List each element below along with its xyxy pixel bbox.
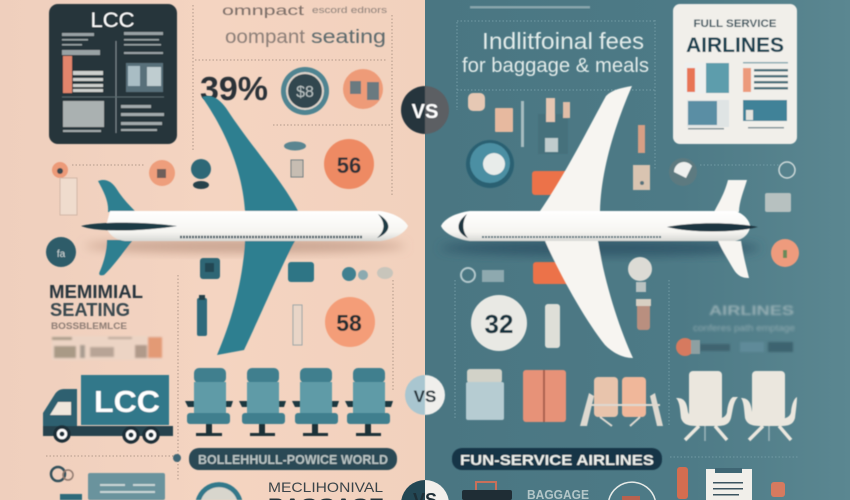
cockpit <box>458 214 468 238</box>
windows <box>180 236 363 238</box>
seat: peach pair <box>580 377 663 426</box>
heading: additional fees <box>462 28 649 77</box>
collage: illegible notes <box>52 336 162 360</box>
seat 3 <box>292 368 339 436</box>
card text lines <box>62 32 163 55</box>
heading: compact seating: oompant <box>225 27 306 48</box>
heading: additional fees: Indlitfoinal <box>482 28 593 54</box>
heading: minimal seating <box>49 282 143 331</box>
truck: LCC <box>43 375 173 442</box>
icons: right small group <box>669 158 799 267</box>
card chart right <box>743 62 788 92</box>
heading: additional fees: fees <box>599 28 644 54</box>
wing: top <box>540 86 632 211</box>
card photo <box>126 63 163 92</box>
faded text: airlines: AIRLINES <box>709 302 794 318</box>
plane: LCC <box>81 96 408 355</box>
wing: bottom <box>545 241 633 358</box>
card photo right <box>743 100 787 121</box>
seat: orange <box>523 370 566 422</box>
engine <box>81 223 177 230</box>
heading: compact seating: seating <box>311 27 386 48</box>
icon: round tag <box>46 237 76 267</box>
card heading: FULL SERVICE <box>694 18 776 30</box>
wing: top <box>202 96 298 211</box>
windows <box>482 236 662 238</box>
icons: below right wing <box>461 257 652 348</box>
badge: bottom circle <box>196 482 242 500</box>
checklist <box>706 468 752 500</box>
engine <box>667 223 758 232</box>
panel: full-service background <box>425 0 850 500</box>
heading: additional fees: for baggage & meals <box>462 55 649 77</box>
icon: round dial <box>466 140 514 188</box>
label bar: full-service airlines <box>452 448 662 470</box>
seats: LCC row <box>185 368 393 436</box>
heading: minimal seating: SEATING <box>50 300 130 320</box>
seat: white left <box>676 371 738 441</box>
tail: top <box>98 180 136 212</box>
VS badge: middle <box>405 375 445 415</box>
icon: orange block top <box>532 171 572 195</box>
card title: airlines: AIRLINES <box>686 34 784 57</box>
icons: right upper group <box>468 93 650 190</box>
badge: 32 <box>471 295 527 351</box>
wheels <box>55 427 158 442</box>
label bar: full-service airlines: FUN-SERVICE AIRLINES <box>460 452 654 469</box>
bottom left: icons and sign <box>51 454 181 500</box>
VS badge: top <box>401 86 449 134</box>
truck cab <box>43 389 77 436</box>
shadow <box>440 240 760 256</box>
cockpit <box>377 214 388 238</box>
seat: pale blue <box>466 369 504 420</box>
heading: compact seating <box>222 2 388 48</box>
LCC info card <box>49 4 177 144</box>
VS badge: bottom <box>401 480 449 500</box>
tail: bottom <box>718 241 749 278</box>
tail: top <box>714 180 747 212</box>
icon: figure <box>284 142 306 177</box>
shadow <box>85 239 405 253</box>
bottom right: icons and checklist <box>677 467 785 500</box>
stat: 39%: 39% <box>200 70 268 107</box>
badge: 58 <box>325 297 375 347</box>
badge: 32: 32 <box>485 309 513 339</box>
icon: peach badge <box>343 69 383 109</box>
seats: full service row <box>466 369 797 441</box>
heading: minimal seating: MEMIMIAL <box>49 282 143 302</box>
truck label: LCC <box>94 384 160 419</box>
card thumbnail <box>63 101 104 127</box>
card caption lines <box>63 105 164 132</box>
fuselage <box>441 211 750 241</box>
icon: orange block bottom <box>533 262 573 284</box>
seat: white right <box>741 371 797 441</box>
label bar: LCC <box>189 448 397 470</box>
card title: LCC: LCC <box>90 9 134 32</box>
wing: bottom <box>217 241 295 355</box>
icon: orange round <box>676 338 700 356</box>
heading: compact seating: omnpact <box>222 2 304 18</box>
icon: teal dial: $8 <box>296 84 314 101</box>
bottom right: badge <box>609 482 655 500</box>
faded text: airlines <box>693 302 795 352</box>
panel: LCC background <box>0 0 425 500</box>
icons: small equipment <box>197 258 393 345</box>
heading: mechanical baggage <box>269 482 383 500</box>
bottom right: luggage <box>462 482 512 500</box>
VS badge: top: VS <box>412 101 438 123</box>
card photo left <box>687 100 729 127</box>
faded text: airlines: conferes path emptage <box>693 323 795 333</box>
badge: 58: 58 <box>336 310 362 336</box>
VS badge: middle: VS <box>414 387 436 406</box>
badge: 56 <box>324 139 374 189</box>
icon: teal dial <box>281 67 329 115</box>
top strip text <box>470 6 590 8</box>
icons: small nodes <box>52 159 211 215</box>
plane: full service <box>440 86 760 358</box>
fuselage <box>106 211 408 241</box>
tail: bottom <box>99 240 133 275</box>
truck box <box>81 375 169 425</box>
card chart left <box>685 63 729 93</box>
full-service info card <box>673 4 797 144</box>
heading: mechanical baggage: MECLIHONIVAL <box>268 479 383 495</box>
label bar: LCC: BOLLEHHULL-POWICE WORLD <box>198 452 388 467</box>
badge: 56: 56 <box>337 153 361 178</box>
seat 1 <box>185 368 233 436</box>
card bar chart <box>63 56 103 93</box>
seat 4 <box>345 368 393 436</box>
seat 2 <box>239 368 286 436</box>
heading: minimal seating: BOSSBLEMLCE <box>51 321 127 331</box>
heading: compact seating: escord ednors <box>312 5 388 15</box>
icon: round tag: fa <box>57 249 66 260</box>
